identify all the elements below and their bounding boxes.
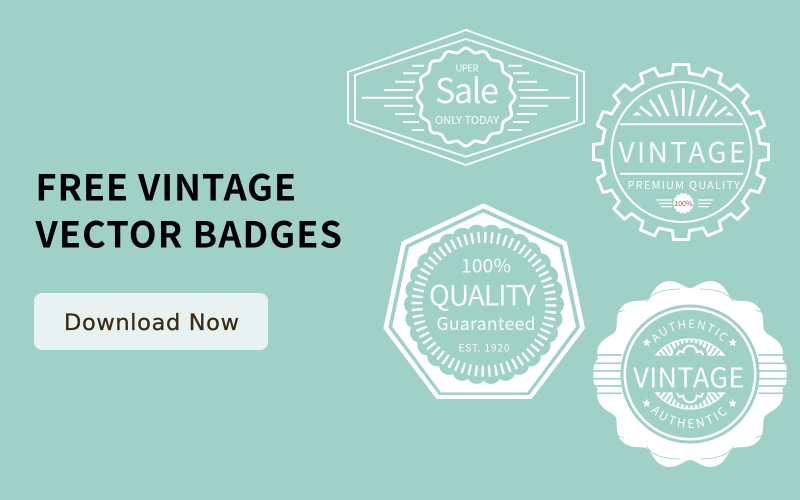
button: download now (34, 293, 268, 350)
heptagon frame (383, 203, 585, 399)
badge text: Sale (435, 64, 499, 113)
authentic top text: AUTHENTIC (652, 320, 728, 343)
badge text: ONLY TODAY (435, 112, 499, 128)
stars (642, 338, 737, 407)
authentic bottom text: AUTHENTIC (650, 406, 727, 428)
badge text (429, 252, 536, 355)
hexagon frame (348, 30, 584, 165)
badge text: UPER (456, 60, 478, 74)
vintage text: VINTAGE (633, 357, 744, 396)
premium quality text: PREMIUM QUALITY (628, 177, 740, 193)
title (34, 160, 342, 258)
vintage text: VINTAGE (618, 132, 746, 172)
badge: quality guaranteed (383, 203, 585, 399)
button: download now: Download Now (64, 310, 239, 336)
seal body with side stripes (590, 276, 790, 472)
badge: vintage gear (594, 64, 768, 240)
inner ring and disc (622, 306, 758, 442)
badge text: EST. 1920 (458, 340, 510, 355)
title: FREE VINTAGE (36, 160, 296, 212)
top fan ornament (654, 338, 726, 356)
title: VECTOR BADGES (34, 206, 342, 258)
badge: authentic vintage (593, 281, 787, 467)
speed lines (362, 66, 570, 130)
badge text: Guaranteed (436, 311, 536, 336)
badge text: 100% (461, 252, 511, 279)
100% seal (656, 194, 714, 212)
sun rays (633, 88, 734, 116)
100% seal: 100% (674, 199, 693, 209)
bottom fan ornament (654, 392, 726, 410)
wavy seal outline (417, 48, 515, 146)
badge text: QUALITY (429, 275, 536, 315)
badge: super sale (348, 30, 584, 165)
gear outline (594, 64, 768, 240)
inner ring and rules (612, 82, 752, 222)
scalloped seal (408, 228, 560, 380)
